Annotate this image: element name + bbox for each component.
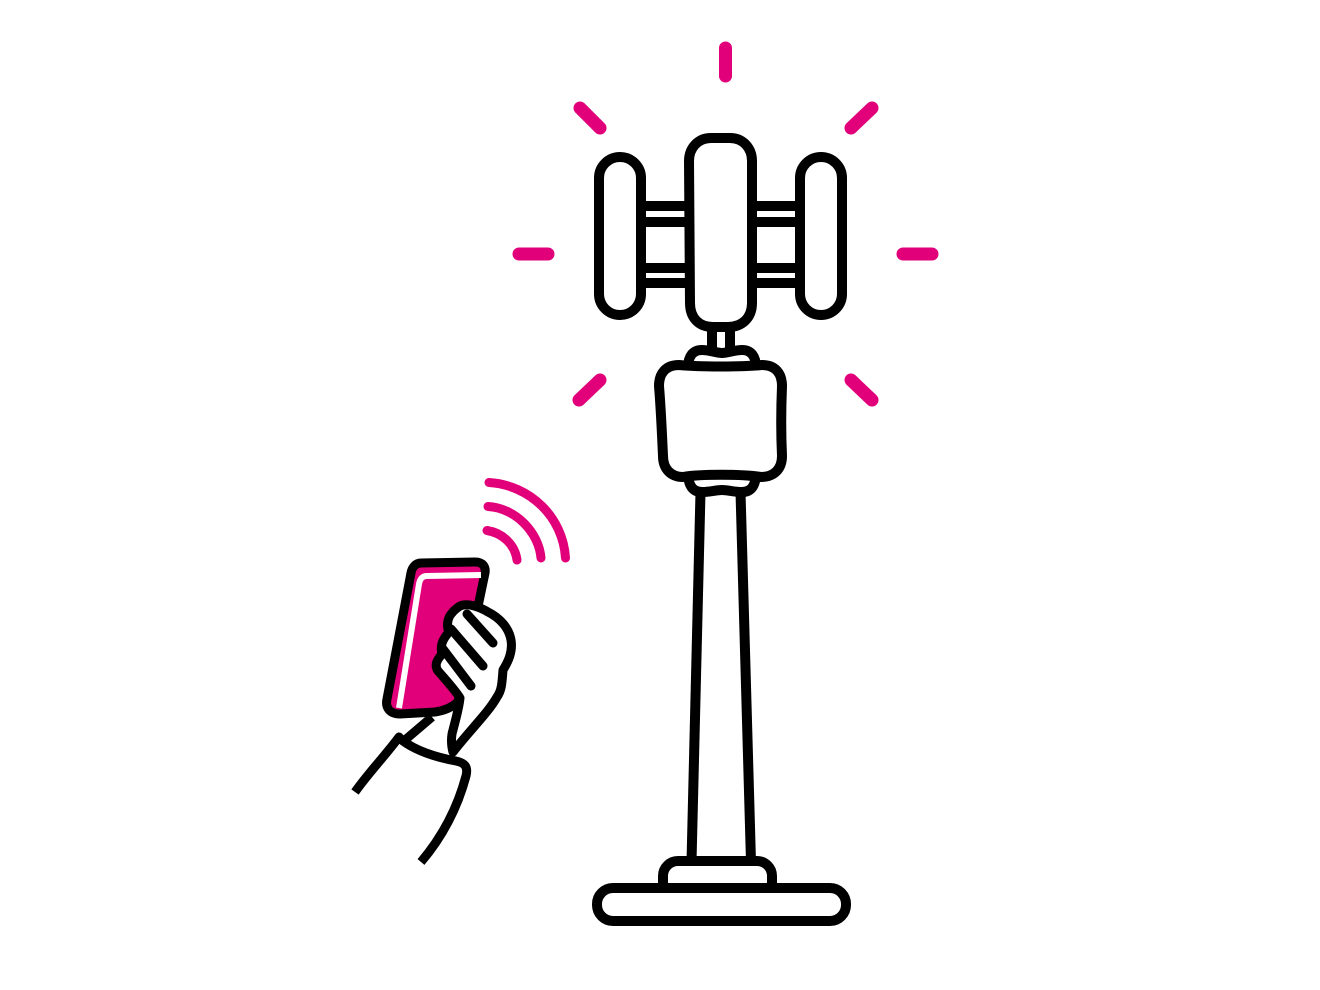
right antenna panel (800, 157, 842, 315)
neck (712, 325, 730, 355)
equipment box (659, 365, 782, 477)
lower collar (688, 472, 756, 492)
icon: phone signal waves (487, 482, 566, 560)
icon: hand holding phone (355, 562, 511, 862)
phone body (387, 562, 485, 714)
icon: signal rays around tower (519, 48, 932, 400)
center antenna panel (689, 138, 752, 327)
tower foot collar (663, 861, 772, 897)
phone screen highlight (399, 575, 481, 708)
icon: cell tower (597, 138, 846, 921)
upper collar (688, 350, 756, 368)
finger lines (443, 614, 493, 686)
left antenna panel (599, 157, 641, 315)
wrist (405, 717, 432, 740)
antenna cross bars (640, 206, 800, 283)
sleeve outline (355, 737, 467, 862)
hand (436, 605, 511, 752)
tower base plate (597, 888, 846, 921)
tower pole (692, 492, 751, 862)
